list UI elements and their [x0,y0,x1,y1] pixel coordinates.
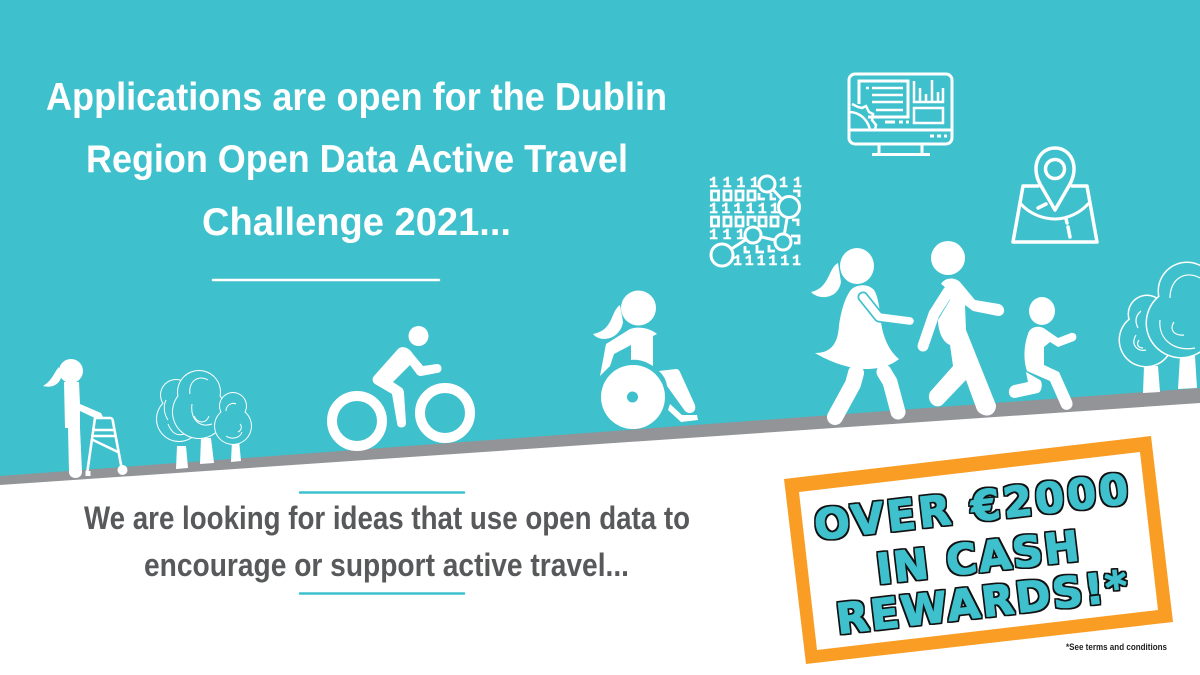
icon: cyclist [332,326,470,446]
icon: binary data network: 111111 [733,253,801,270]
footnote: terms and conditions: *See terms and conditions [1066,642,1167,652]
icon: binary data network: 111 [709,227,745,244]
road [0,388,1200,485]
panel: title text: Applications are open for the Dublin [46,76,667,119]
panel: description text [84,492,690,594]
panel: teal sky background [0,0,1200,478]
callout: cash rewards box: OVER €2000 [811,464,1131,550]
panel: title text: Challenge 2021... [202,201,511,244]
icon: tree group left [156,370,252,469]
panel: description text: encourage or support active travel... [144,547,629,583]
icon: binary data network: 111111 [709,201,779,218]
icon: binary data network: 11 [779,175,802,192]
callout: cash rewards box: REWARDS!* [833,561,1130,644]
icon: binary data network [709,175,802,270]
panel: title text: Region Open Data Active Travel [86,138,628,181]
panel: title text [46,76,667,244]
icon: tree group right [1118,262,1200,393]
icon: map with location pin [1013,148,1097,242]
icon: man walking [923,241,1004,415]
icon: woman walking in dress [811,248,912,417]
icon: woman with walking frame [43,359,128,478]
panel: description text: We are looking for ideas that use open data to [84,500,690,536]
icon: binary data network: 1111 [709,175,759,192]
icon: monitor dashboard [849,74,952,154]
callout: cash rewards box: IN CASH [873,521,1082,594]
callout: cash rewards box [784,436,1173,664]
icon: child running [1009,297,1076,410]
icon: person in wheelchair [593,290,698,429]
